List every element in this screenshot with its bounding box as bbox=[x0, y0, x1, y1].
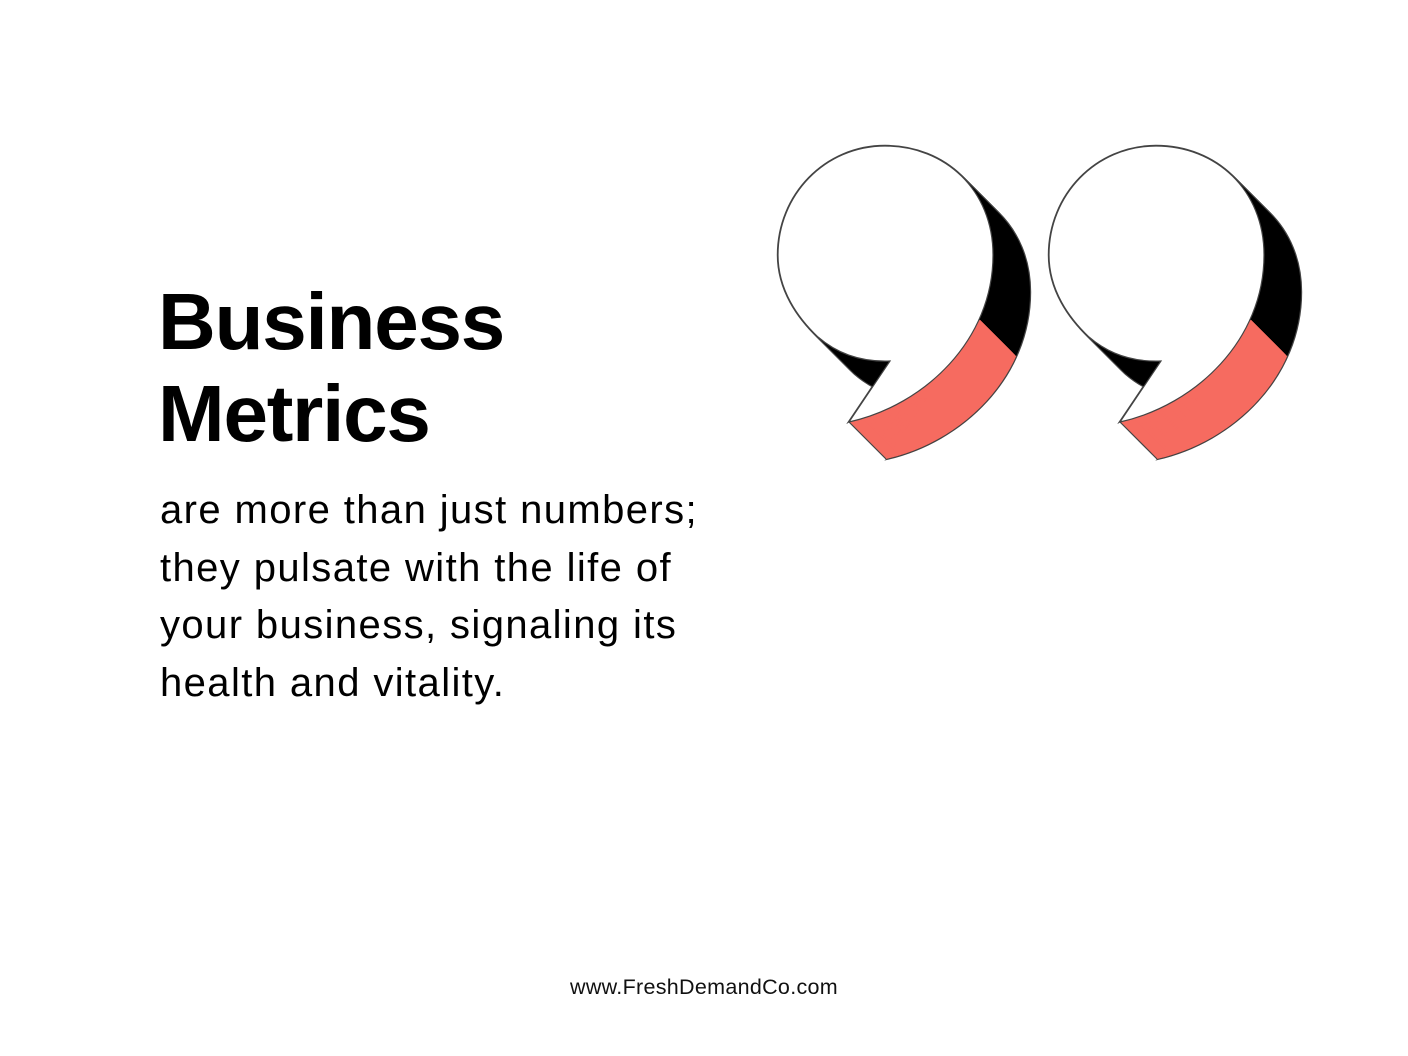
title bbox=[158, 277, 504, 458]
title: Metrics bbox=[158, 369, 430, 458]
text block: description: your business, signaling its bbox=[160, 603, 677, 647]
quote mark 2 bbox=[1049, 146, 1301, 463]
text block: description bbox=[160, 488, 698, 704]
text block: description: they pulsate with the life of bbox=[160, 546, 672, 590]
text block: description: health and vitality. bbox=[160, 660, 505, 704]
icon: quotation marks bbox=[776, 144, 1302, 461]
quote mark 1 bbox=[778, 146, 1030, 463]
text block: description: are more than just numbers; bbox=[160, 488, 698, 532]
footer url: www.FreshDemandCo.com bbox=[570, 975, 838, 999]
title: Business bbox=[158, 277, 504, 366]
